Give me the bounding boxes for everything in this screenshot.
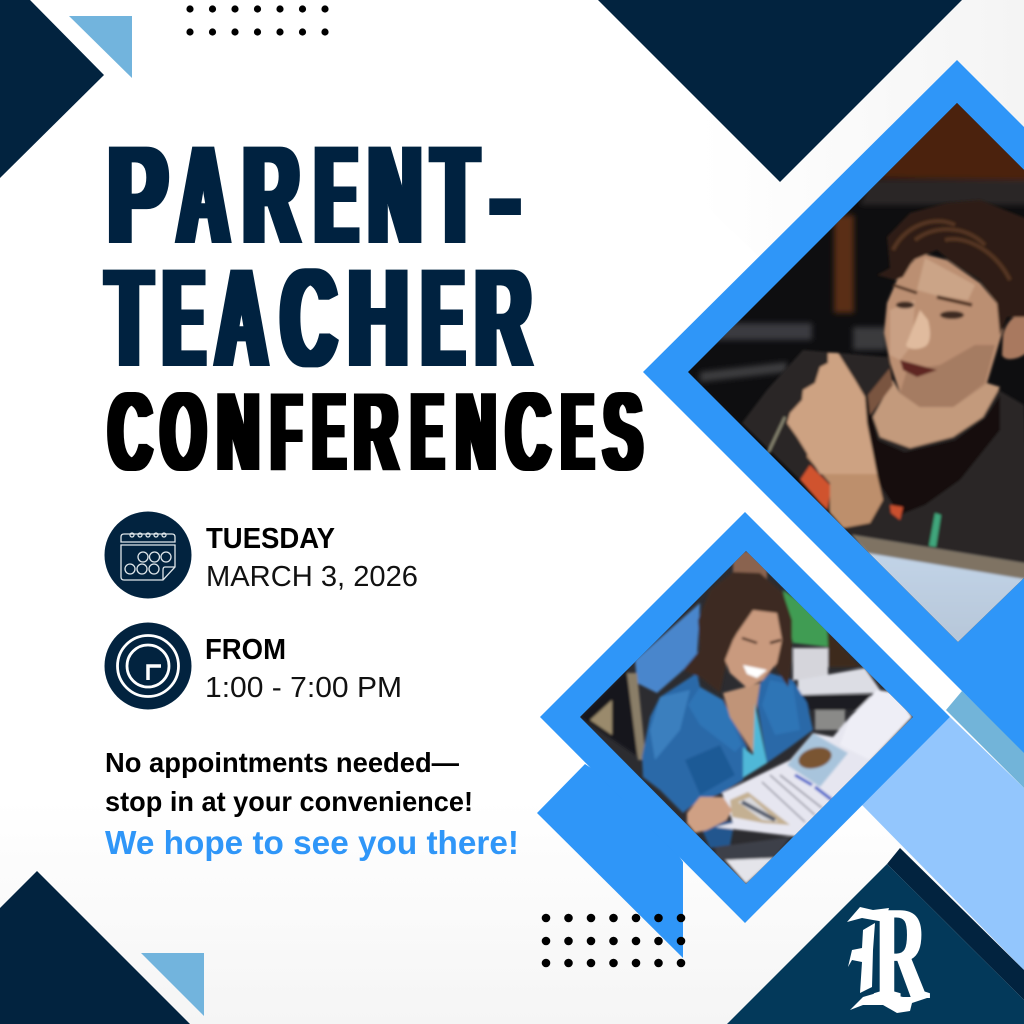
neck: [873, 380, 1000, 448]
text: details: No appointments needed—: [105, 747, 459, 778]
poster writing: [795, 775, 832, 800]
text: date: [206, 523, 418, 593]
title line: TEACHER: R: [475, 239, 531, 396]
chest: [723, 683, 760, 753]
title line: CONFERENCES: N: [217, 370, 259, 494]
shape: top-left navy triangle: [0, 0, 104, 178]
title line: CONFERENCES: C: [506, 370, 550, 494]
title line: CONFERENCES: F: [272, 370, 301, 494]
text: time: FROM: [205, 634, 286, 666]
logo: blackletter R: [847, 880, 930, 1024]
zipper: [768, 417, 785, 453]
logo: blackletter R: R: [874, 880, 929, 1024]
title line: PARENT-: P: [108, 116, 167, 273]
text: time: [205, 634, 402, 704]
shape: dark navy band: [887, 848, 1024, 1000]
title line: TEACHER: T: [107, 239, 151, 396]
text: invitation: We hope to see you there!: [105, 824, 519, 861]
title line: PARENT-: A: [178, 116, 229, 273]
dots: top pattern: [186, 5, 329, 36]
dots: bottom pattern: [542, 914, 685, 967]
title line: CONFERENCES: E: [412, 370, 443, 494]
lap: [715, 837, 790, 860]
jacket: [642, 673, 747, 813]
background scene: [733, 551, 767, 580]
eyes and brows: [896, 302, 914, 308]
title line: CONFERENCES: [109, 370, 642, 494]
laptop: [852, 534, 1024, 642]
hair: [683, 572, 792, 693]
text: details: stop in at your convenience!: [105, 786, 473, 817]
pen: [929, 513, 941, 547]
title line: TEACHER: [107, 239, 531, 396]
photo: student in hoodie: [680, 95, 1024, 660]
shape: light blue panel: [862, 717, 1024, 970]
title: [107, 116, 642, 494]
photo: smiling parent with poster: [575, 545, 920, 890]
shape: bottom-left navy triangle: [0, 871, 190, 1024]
title line: CONFERENCES: R: [354, 370, 398, 494]
title line: PARENT-: -: [491, 116, 519, 273]
shape: blue notch under lower frame: [537, 764, 683, 958]
title line: TEACHER: A: [216, 239, 267, 396]
silver picture: [730, 792, 790, 825]
title line: CONFERENCES: C: [109, 370, 152, 494]
icon: clock: [104, 622, 192, 710]
face: [884, 253, 1003, 407]
nose: [906, 310, 930, 349]
tee: [866, 395, 1000, 515]
shape: teal strip: [946, 691, 1024, 788]
print on shirt: [800, 465, 832, 510]
text: time: 1:00 - 7:00 PM: [205, 672, 402, 704]
text: date: TUESDAY: [206, 523, 335, 555]
shape: top-left light blue triangle: [69, 16, 132, 78]
teal top: [743, 703, 767, 778]
beaver picture: [787, 733, 848, 787]
title line: PARENT-: E: [316, 116, 357, 273]
title line: TEACHER: C: [281, 239, 336, 396]
title line: CONFERENCES: E: [313, 370, 345, 494]
hoodie: [742, 350, 1024, 570]
icon: calendar: [104, 512, 192, 598]
mouth: [900, 360, 937, 377]
title line: PARENT-: R: [243, 116, 299, 273]
poster: [715, 716, 910, 838]
title line: CONFERENCES: S: [604, 370, 642, 494]
title line: PARENT-: T: [433, 116, 478, 273]
title line: CONFERENCES: N: [456, 370, 496, 494]
hand: [787, 353, 877, 474]
shape: top navy triangle: [598, 0, 962, 182]
title line: CONFERENCES: E: [562, 370, 593, 494]
forearm: [804, 454, 885, 530]
face: [725, 610, 782, 688]
title line: PARENT-: [108, 116, 519, 273]
shape: bottom-right navy triangle: [727, 864, 1024, 1024]
shape: bottom-left light blue triangle: [141, 953, 204, 1016]
photo frame: lower blue diamond: [540, 512, 950, 923]
photo frame: upper blue diamond: [643, 60, 1024, 753]
title line: CONFERENCES: O: [161, 370, 206, 494]
hair: [877, 200, 1024, 335]
title line: TEACHER: E: [164, 239, 204, 396]
text: details: [105, 747, 519, 861]
ear: [1002, 313, 1024, 359]
title line: TEACHER: E: [422, 239, 463, 396]
title line: TEACHER: H: [348, 239, 408, 396]
hand: [687, 797, 732, 833]
title line: PARENT-: N: [369, 116, 421, 273]
text: date: MARCH 3, 2026: [206, 561, 418, 593]
